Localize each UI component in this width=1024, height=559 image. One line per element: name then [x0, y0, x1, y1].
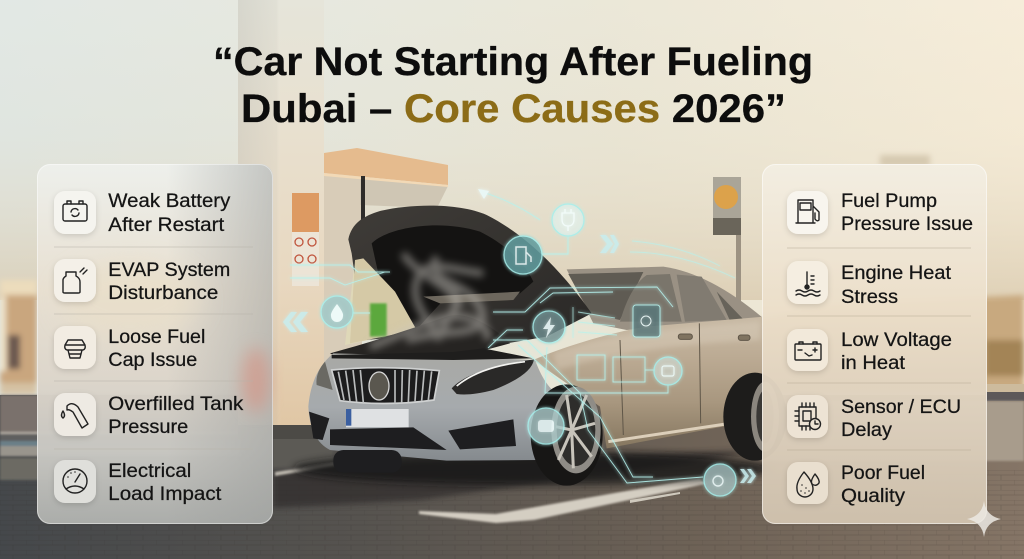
item: sensor ECU: Sensor / ECU	[841, 396, 961, 418]
icon node: gauge	[704, 464, 736, 496]
car cabin and windows	[567, 267, 763, 330]
item: electrical load: Electrical	[108, 460, 191, 482]
icon node: engine	[528, 408, 564, 444]
item: engine heat: Engine Heat	[841, 262, 952, 284]
item: EVAP system	[54, 259, 230, 304]
item: low voltage: in Heat	[841, 352, 906, 374]
item: fuel pump: Pressure Issue	[841, 213, 973, 235]
item: sensor ECU	[787, 395, 961, 441]
item: poor fuel quality	[787, 462, 925, 507]
car with open hood	[293, 206, 787, 486]
item: overfilled tank	[54, 393, 244, 438]
icon node: fuel pump	[504, 236, 542, 274]
grille with star emblem	[332, 368, 439, 404]
fuel pump canopy	[324, 148, 448, 372]
item: weak battery: Weak Battery	[108, 190, 231, 212]
holographic diagnostic overlay	[283, 189, 756, 496]
icon node: plug	[552, 204, 584, 236]
item: sensor ECU: Delay	[841, 419, 892, 441]
item: poor fuel quality: Quality	[841, 485, 905, 507]
rear wheel	[723, 373, 787, 461]
item: engine heat	[787, 261, 952, 308]
item: EVAP system: Disturbance	[108, 282, 218, 304]
item: EVAP system: EVAP System	[108, 259, 230, 281]
fuel station pillar with warning sign	[238, 0, 324, 439]
headlights	[316, 359, 534, 394]
hood lip	[332, 348, 533, 360]
title: “Car Not Starting After Fueling	[213, 40, 813, 84]
item: low voltage	[787, 329, 952, 374]
title	[213, 40, 813, 131]
lower air intakes	[309, 412, 516, 473]
item: loose fuel cap: Cap Issue	[108, 349, 197, 371]
icon node: battery bolt	[533, 311, 565, 343]
front bumper	[308, 353, 557, 461]
engine bay and open hood	[330, 206, 592, 357]
item: overfilled tank: Pressure	[108, 416, 188, 438]
door shoulder highlight	[553, 322, 760, 370]
circuit lines	[290, 189, 735, 483]
item: poor fuel quality: Poor Fuel	[841, 462, 925, 484]
car cast shadow on road	[273, 450, 760, 508]
door lines and handles	[608, 323, 750, 442]
smoke from engine	[370, 253, 487, 347]
item: low voltage: Low Voltage	[841, 329, 952, 351]
chevrons	[283, 235, 756, 483]
title: Dubai – Core Causes 2026”	[241, 87, 786, 131]
icon node: engine sensor	[654, 357, 682, 385]
item: loose fuel cap	[54, 326, 205, 371]
front wheel	[531, 384, 603, 486]
item: loose fuel cap: Loose Fuel	[108, 326, 205, 348]
number plate	[346, 409, 409, 427]
icon node: chip on door mirror	[633, 305, 660, 337]
roadside fuel price sign	[713, 177, 741, 304]
item: weak battery: After Restart	[108, 214, 225, 236]
item: engine heat: Stress	[841, 286, 898, 308]
car ground shadow	[293, 452, 773, 485]
panel: right causes	[762, 164, 987, 524]
item: electrical load: Load Impact	[108, 483, 222, 505]
item: overfilled tank: Overfilled Tank	[108, 393, 244, 415]
item: fuel pump	[787, 190, 973, 235]
item: fuel pump: Fuel Pump	[841, 190, 937, 212]
car side body	[533, 317, 763, 448]
item: electrical load	[54, 460, 222, 505]
icon node: fuel drop	[321, 296, 353, 328]
icon: sparkle watermark	[967, 501, 1001, 537]
panel: left causes	[37, 164, 273, 524]
item: weak battery	[54, 190, 231, 236]
